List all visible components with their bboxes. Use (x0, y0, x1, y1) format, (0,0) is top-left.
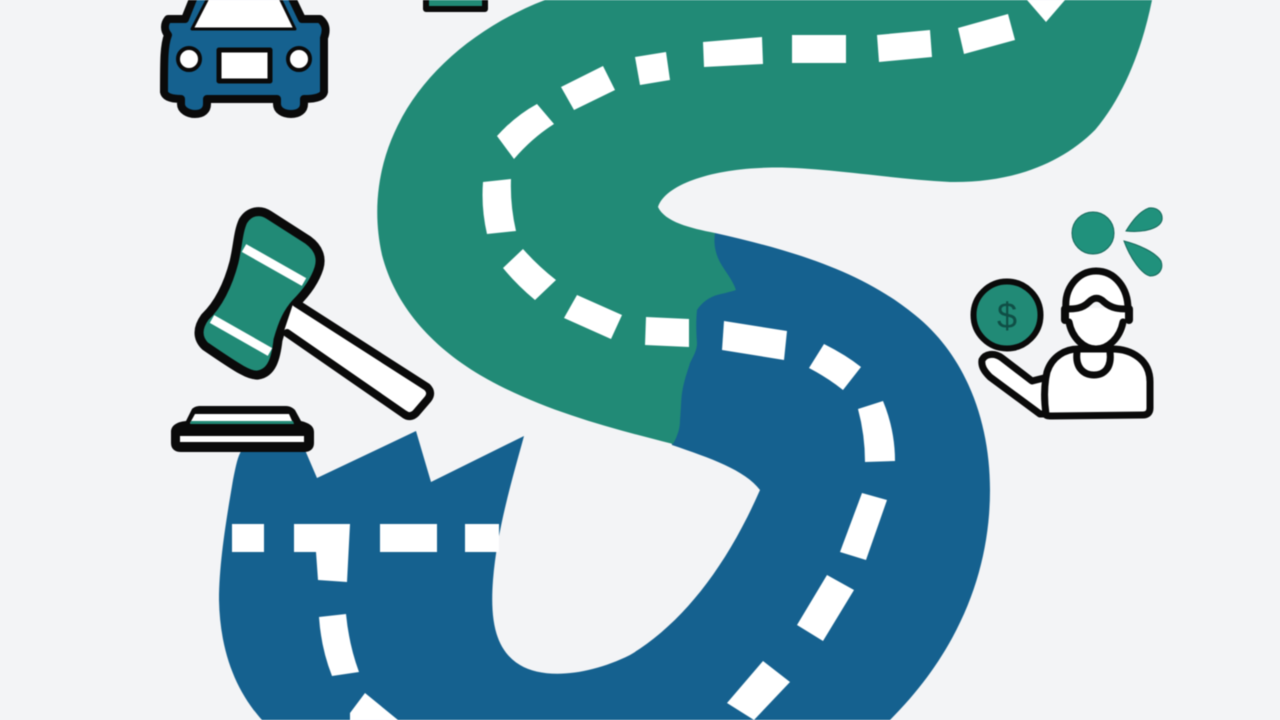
icon: partial green object at top (426, 0, 485, 9)
dollar sign: $ (997, 295, 1017, 336)
icon: sweat drops (1072, 208, 1162, 276)
gavel base (171, 406, 314, 452)
gavel head (199, 212, 320, 375)
hair (1066, 271, 1128, 309)
ears (1065, 309, 1129, 320)
coin (974, 282, 1040, 348)
face (1068, 308, 1126, 350)
gavel handle (284, 301, 430, 416)
icon: car (164, 0, 326, 114)
hand (982, 354, 1048, 414)
gavel stripes (212, 248, 304, 352)
icon: gavel (171, 212, 430, 452)
road: green upper section (377, 0, 1152, 444)
collar (1077, 352, 1110, 375)
road centre dashes (232, 0, 1065, 720)
icon: person with coin (974, 271, 1150, 416)
road: blue lower section (219, 233, 990, 720)
body (1045, 349, 1150, 416)
